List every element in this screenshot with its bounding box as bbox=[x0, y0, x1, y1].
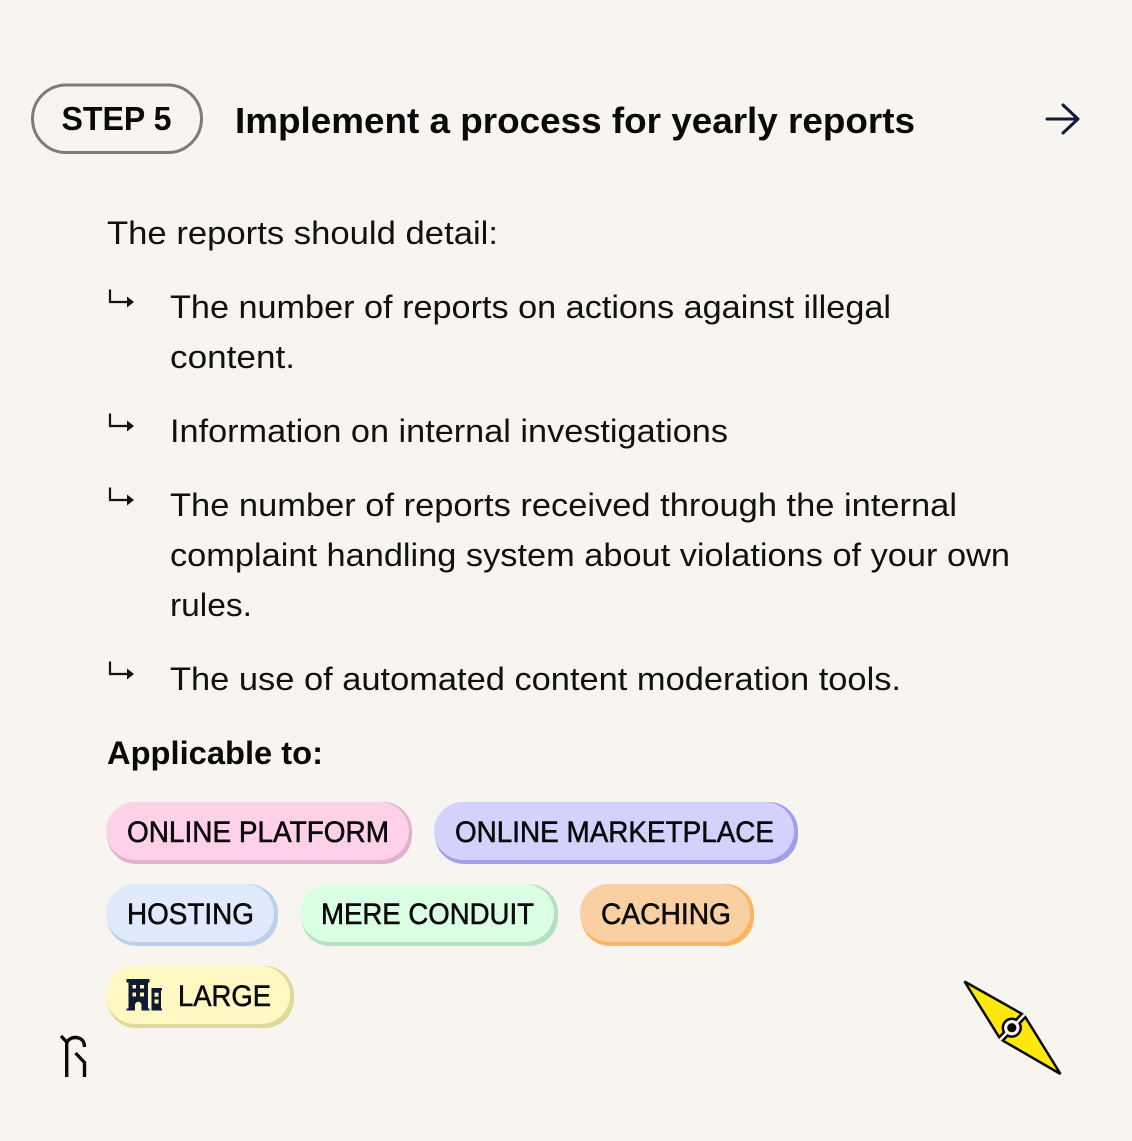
bullet 2: Information on internal investigations bbox=[170, 413, 728, 449]
tag: hosting bbox=[106, 884, 278, 946]
icon: logo mark bbox=[61, 1036, 84, 1077]
bullet list bbox=[110, 289, 1010, 697]
tag: mere conduit bbox=[300, 884, 558, 946]
bullet 3 bbox=[110, 487, 1010, 623]
step badge bbox=[32, 85, 202, 152]
step badge: STEP 5 bbox=[62, 100, 172, 137]
tag: large bbox=[106, 966, 294, 1028]
bullet 1 bbox=[110, 289, 891, 375]
icon: next arrow bbox=[1047, 105, 1078, 133]
tag: caching: CACHING bbox=[601, 898, 731, 931]
title: Implement a process for yearly reports bbox=[235, 100, 915, 141]
icon: building bbox=[126, 979, 162, 1010]
tag: mere conduit: MERE CONDUIT bbox=[321, 898, 534, 931]
tag: online marketplace bbox=[434, 802, 798, 864]
bullet 1: content. bbox=[170, 339, 295, 375]
bullet 4: The use of automated content moderation tools. bbox=[170, 661, 901, 697]
tag: caching bbox=[580, 884, 754, 946]
icon: compass needle bbox=[964, 982, 1060, 1074]
bullet 1: The number of reports on actions against illegal bbox=[170, 289, 891, 325]
tag: online marketplace: ONLINE MARKETPLACE bbox=[455, 816, 774, 849]
tag: hosting: HOSTING bbox=[127, 898, 254, 931]
bullet 3: The number of reports received through the internal bbox=[170, 487, 957, 523]
intro text: The reports should detail: bbox=[107, 215, 498, 251]
applicable heading: Applicable to: bbox=[107, 735, 323, 771]
tag: online platform: ONLINE PLATFORM bbox=[127, 816, 389, 849]
tag: online platform bbox=[106, 802, 412, 864]
bullet 3: complaint handling system about violations of your own bbox=[170, 537, 1010, 573]
tag: large: LARGE bbox=[178, 980, 271, 1013]
bullet 3: rules. bbox=[170, 587, 252, 623]
